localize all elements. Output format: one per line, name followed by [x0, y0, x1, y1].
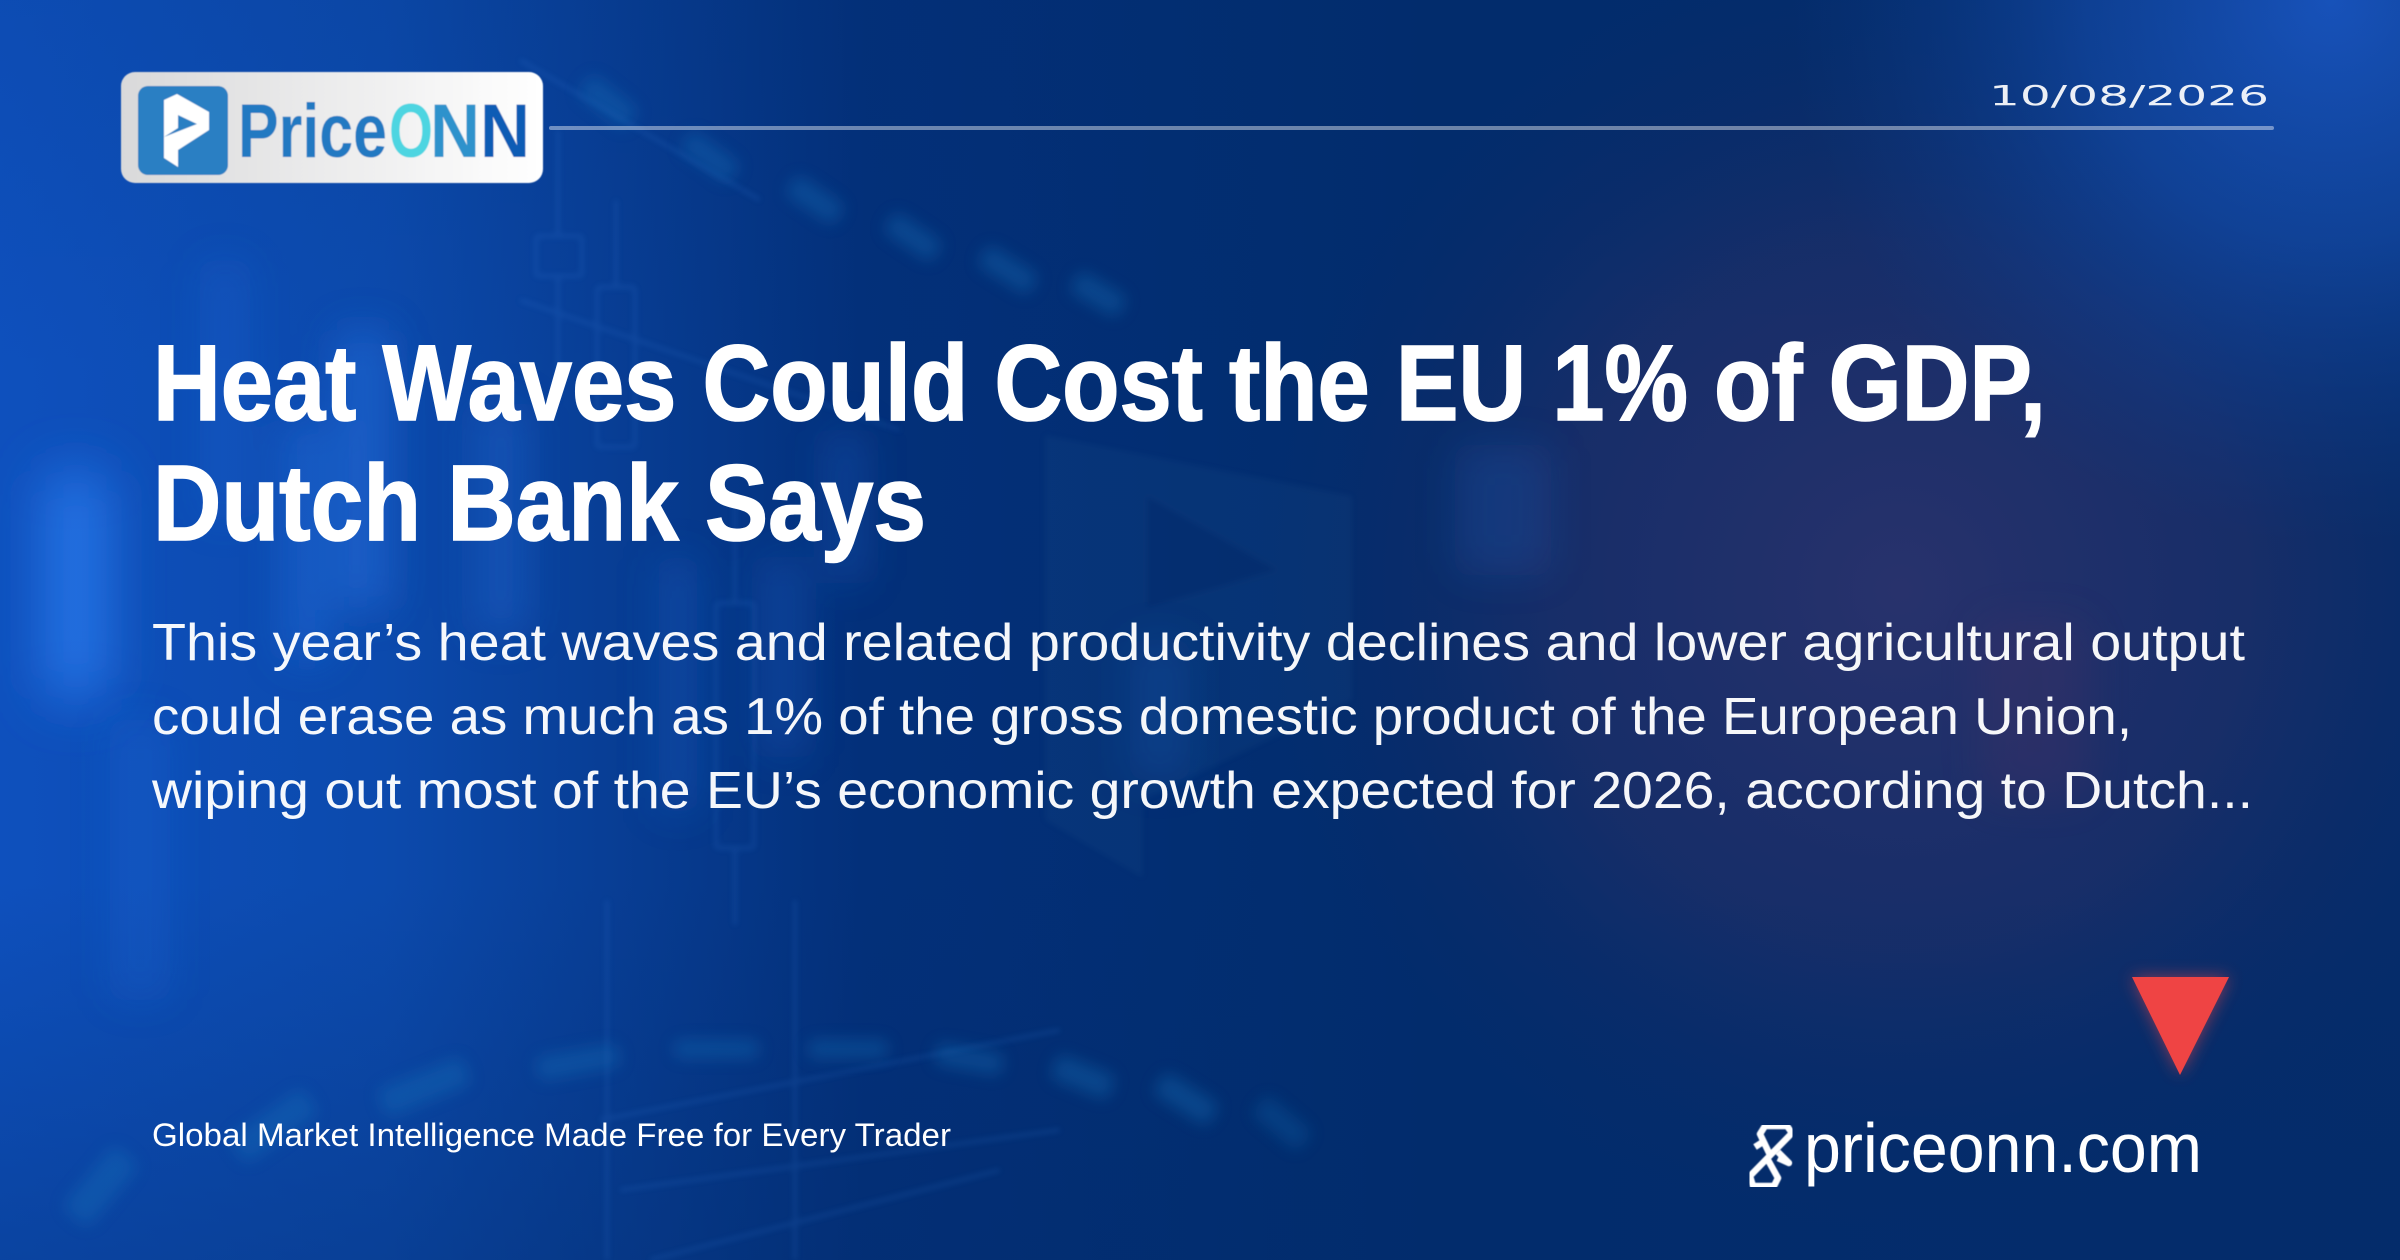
- logo plate: [121, 72, 543, 183]
- summary line 3: wiping out most of the EU’s economic growth expected for 2026, according to Dutch...: [151, 762, 2253, 820]
- logo wordmark: O: [389, 89, 433, 174]
- title line 2: Dutch Bank Says: [153, 442, 926, 563]
- title: [153, 322, 2046, 563]
- icon: priceonn mark: [1750, 1126, 1792, 1186]
- logo wordmark: Price: [238, 89, 387, 174]
- watermark: brand mark: [1045, 435, 1352, 878]
- logo: PriceONN: [121, 72, 543, 183]
- background: red tint right: [1980, 620, 2090, 800]
- summary paragraph: [151, 614, 2253, 820]
- date: 10/08/2026: [1989, 80, 2269, 112]
- logo wordmark: [238, 89, 530, 174]
- summary line 1: This year’s heat waves and related productivity declines and lower agricultural output: [152, 614, 2246, 672]
- background: blurred candlesticks: [45, 60, 1551, 1260]
- footer brand: priceonn.com: [1750, 1109, 2202, 1187]
- site url: priceonn.com: [1804, 1109, 2202, 1187]
- logo icon: [138, 86, 228, 175]
- header rule: [549, 126, 2274, 130]
- logo wordmark: N: [480, 89, 530, 174]
- summary line 2: could erase as much as 1% of the gross domestic product of the European Union,: [152, 688, 2132, 746]
- icon: red down arrow: [2132, 977, 2229, 1075]
- logo wordmark: N: [430, 89, 480, 174]
- tagline: Global Market Intelligence Made Free for Every Trader: [152, 1117, 951, 1153]
- title line 1: Heat Waves Could Cost the EU 1% of GDP,: [153, 322, 2046, 443]
